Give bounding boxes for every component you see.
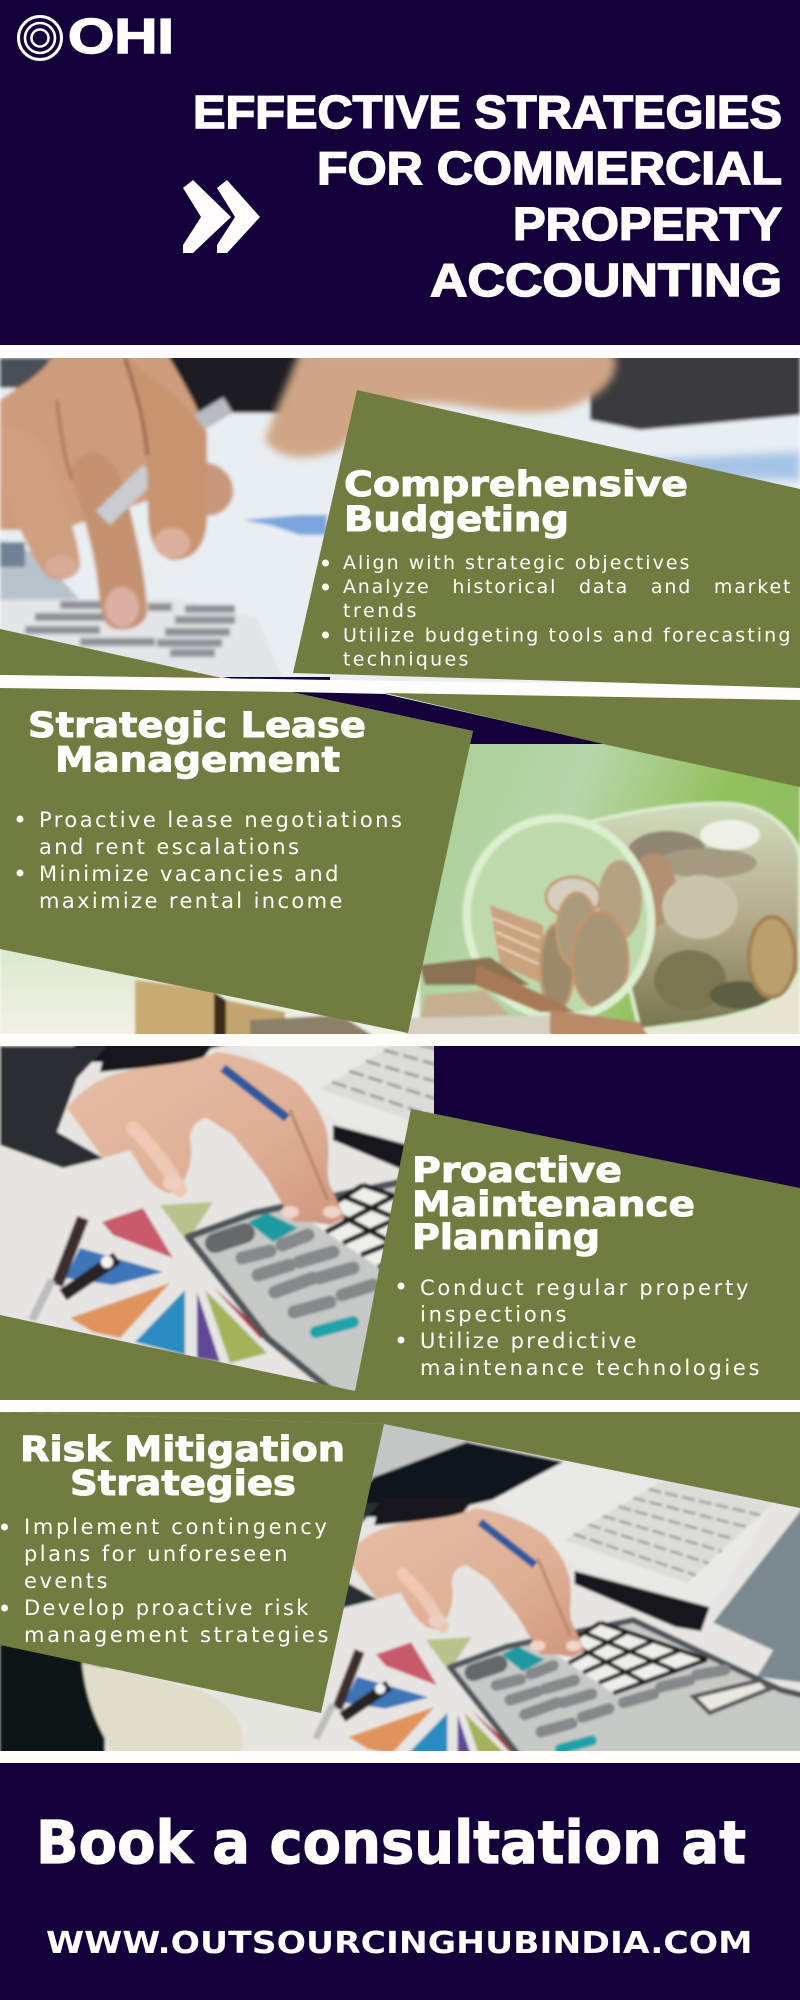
heading: proactive maintenance planning bbox=[412, 1151, 695, 1258]
bullet list bbox=[16, 808, 402, 913]
bullet list: Utilize budgeting tools and forecasting bbox=[343, 624, 791, 646]
bullet list bbox=[322, 552, 791, 670]
bullet list: Develop proactive risk bbox=[24, 1596, 309, 1620]
title bbox=[193, 86, 782, 306]
bullet list: Align with strategic objectives bbox=[343, 552, 690, 574]
bullet list: Proactive lease negotiations bbox=[39, 808, 402, 832]
bullet list: techniques bbox=[343, 648, 469, 670]
heading: risk mitigation strategies bbox=[20, 1430, 345, 1504]
bullet list: Implement contingency bbox=[24, 1515, 328, 1539]
olive top-right band bbox=[385, 693, 800, 787]
bullet list: Analyze historical data and market bbox=[343, 576, 791, 598]
panel: risk mitigation strategies bbox=[0, 1412, 800, 1751]
olive text panel bbox=[0, 1412, 384, 1713]
logo bbox=[18, 10, 174, 64]
title: PROPERTY bbox=[513, 198, 782, 250]
website url: WWW.OUTSOURCINGHUBINDIA.COM bbox=[46, 1926, 752, 1961]
heading: comprehensive budgeting bbox=[344, 465, 688, 540]
photo: desk with calculator and laptop bbox=[0, 1414, 800, 1751]
olive text panel bbox=[0, 1109, 800, 1400]
navy sliver bbox=[222, 677, 330, 683]
title: FOR COMMERCIAL bbox=[317, 142, 782, 194]
photo: hand on calculator bbox=[0, 350, 800, 685]
bullet list: inspections bbox=[420, 1302, 567, 1326]
heading: comprehensive budgeting: Budgeting bbox=[344, 500, 569, 540]
photo: jar of coins bbox=[0, 740, 800, 1040]
bullet list: Utilize predictive bbox=[420, 1329, 637, 1353]
olive corner wedge bbox=[0, 629, 222, 678]
heading: risk mitigation strategies: Risk Mitigation bbox=[20, 1430, 345, 1470]
olive top band bbox=[0, 1412, 800, 1508]
navy wedge bbox=[291, 692, 605, 744]
olive text panel bbox=[0, 688, 473, 1033]
heading: risk mitigation strategies: Strategies bbox=[70, 1464, 296, 1504]
bullet list: maximize rental income bbox=[39, 889, 343, 913]
bullet list bbox=[398, 1276, 760, 1380]
title: ACCOUNTING bbox=[430, 254, 782, 306]
bullet list bbox=[1, 1515, 329, 1647]
photo: hand on calculator with laptop bbox=[0, 1046, 434, 1391]
olive text panel bbox=[293, 390, 800, 688]
navy block bbox=[434, 1046, 800, 1206]
heading: strategic lease management: Management bbox=[55, 740, 340, 780]
bullet list: maintenance technologies bbox=[420, 1356, 760, 1380]
arrow: double chevron bbox=[183, 180, 260, 253]
heading: strategic lease management bbox=[28, 706, 366, 780]
heading: comprehensive budgeting: Comprehensive bbox=[344, 465, 688, 505]
footer: call to action bbox=[0, 1763, 800, 2000]
bullet list: and rent escalations bbox=[39, 835, 300, 859]
heading: proactive maintenance planning: Maintenance bbox=[412, 1185, 695, 1225]
bullet list: plans for unforeseen bbox=[24, 1542, 288, 1566]
title: EFFECTIVE STRATEGIES bbox=[193, 86, 782, 138]
bullet list: management strategies bbox=[24, 1623, 329, 1647]
bullet list: Conduct regular property bbox=[420, 1276, 749, 1300]
heading: strategic lease management: Strategic Lease bbox=[28, 706, 366, 746]
bullet list: Minimize vacancies and bbox=[39, 862, 339, 886]
logo wordmark: OHI bbox=[68, 10, 174, 64]
white band bbox=[0, 675, 800, 700]
bullet list: trends bbox=[343, 600, 417, 622]
icon: concentric target logo bbox=[18, 16, 62, 60]
bullet list: events bbox=[24, 1569, 108, 1593]
heading: book a consultation: Book a consultation at bbox=[36, 1808, 746, 1877]
panel: strategic lease management bbox=[0, 688, 800, 1040]
panel: proactive maintenance planning bbox=[0, 1046, 800, 1400]
panel: comprehensive budgeting bbox=[0, 350, 800, 700]
header background bbox=[0, 0, 800, 345]
heading: proactive maintenance planning: Planning bbox=[412, 1218, 600, 1258]
heading: proactive maintenance planning: Proactive bbox=[412, 1151, 622, 1191]
